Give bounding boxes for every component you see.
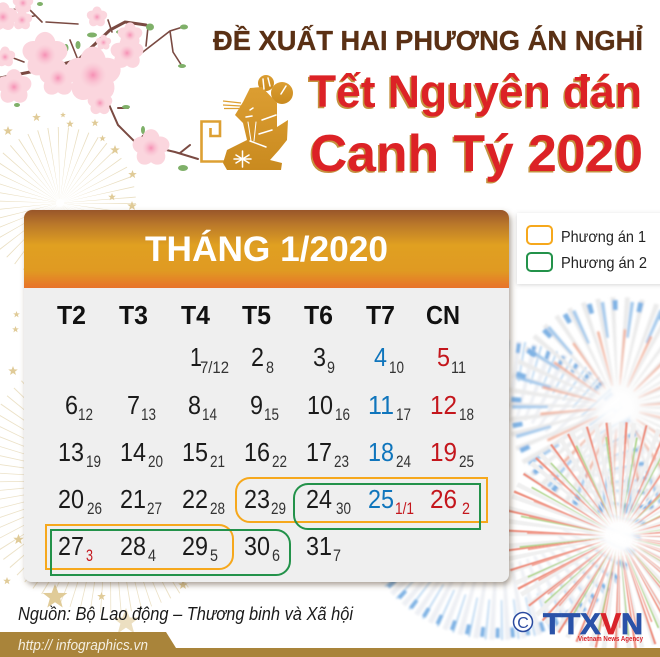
calendar dates: 14: [120, 437, 146, 467]
weekday headings: T6: [304, 300, 333, 330]
calendar dates: 22: [182, 484, 208, 514]
calendar dates: 29: [271, 499, 286, 518]
calendar dates: 12: [78, 405, 93, 424]
logo: TTXVN: TTXVN: [543, 608, 643, 641]
firework: blue and orange upper right: [516, 305, 660, 509]
weekday headings: T2: [57, 300, 86, 330]
calendar dates: 25: [368, 484, 394, 514]
calendar dates: 23: [334, 452, 349, 471]
calendar dates: 27: [147, 499, 162, 518]
highlight: option 1 part two: [46, 525, 233, 569]
calendar dates: 21: [120, 484, 146, 514]
calendar dates: 3: [313, 342, 326, 372]
icon: golden rat zodiac: [202, 75, 293, 170]
calendar dates: 18: [459, 405, 474, 424]
logo: TTXVN: Vietnam News Agency: [578, 634, 644, 643]
title line 3: Canh Tý 2020: [310, 125, 643, 183]
calendar dates: 5: [210, 546, 218, 565]
calendar dates: 24: [396, 452, 411, 471]
cherry blossom branch: [0, 0, 198, 171]
calendar dates: 10: [389, 358, 404, 377]
calendar dates: 2: [462, 499, 470, 518]
calendar dates: 7: [333, 546, 341, 565]
calendar dates: 21: [210, 452, 225, 471]
footer url: http:// infographics.vn: [18, 637, 148, 654]
highlight: option 2 part one: [294, 484, 480, 529]
calendar dates: 10: [307, 390, 333, 420]
legend: option 2: Phương án 2: [561, 255, 647, 272]
calendar dates: 23: [244, 484, 270, 514]
firework: gold top left: [3, 112, 137, 243]
calendar month title: THÁNG 1/2020: [145, 229, 388, 269]
calendar dates: 20: [148, 452, 163, 471]
calendar dates: 24: [306, 484, 332, 514]
legend: option 1: Phương án 1: [561, 229, 646, 246]
calendar dates: 26: [87, 499, 102, 518]
panel: calendar: [24, 210, 509, 582]
calendar dates: 12: [430, 390, 457, 420]
calendar dates: 27: [58, 531, 84, 561]
calendar body: [24, 210, 509, 582]
calendar dates: 16: [244, 437, 270, 467]
calendar dates: 1: [190, 342, 202, 372]
logo: TTXVN: C: [517, 615, 529, 632]
calendar dates: 4: [374, 342, 387, 372]
calendar dates: 16: [335, 405, 350, 424]
weekday headings: T7: [366, 300, 395, 330]
calendar dates: 15: [264, 405, 279, 424]
calendar dates: 1/1: [395, 499, 414, 518]
calendar dates: 11: [451, 358, 466, 377]
calendar dates: 15: [182, 437, 208, 467]
calendar dates: 8: [188, 390, 201, 420]
calendar dates: 4: [148, 546, 156, 565]
footer band: [0, 632, 660, 657]
calendar dates: 7: [127, 390, 140, 420]
calendar dates: 7/12: [200, 358, 229, 377]
calendar dates: 18: [368, 437, 394, 467]
calendar dates: 13: [58, 437, 84, 467]
calendar dates: 22: [272, 452, 287, 471]
calendar dates: 28: [120, 531, 146, 561]
calendar dates: 17: [306, 437, 332, 467]
calendar dates: 2: [251, 342, 264, 372]
calendar dates: 30: [336, 499, 351, 518]
calendar dates: 17: [396, 405, 411, 424]
title line 2: Tết Nguyên đán: [309, 66, 642, 117]
source note: Nguồn: Bộ Lao động – Thương binh và Xã hội: [18, 604, 354, 624]
calendar dates: 20: [58, 484, 84, 514]
title line 1: ĐỀ XUẤT HAI PHƯƠNG ÁN NGHỈ: [213, 24, 643, 56]
calendar dates: 5: [437, 342, 450, 372]
weekday headings: T5: [242, 300, 271, 330]
calendar dates: 11: [368, 390, 394, 420]
firework: red and green lower right: [555, 472, 660, 600]
weekday headings: [57, 300, 460, 330]
calendar header band: [24, 210, 509, 288]
calendar dates: 25: [459, 452, 474, 471]
calendar dates: 3: [86, 546, 93, 565]
calendar dates: 19: [430, 437, 457, 467]
legend: [517, 213, 660, 284]
calendar dates: 9: [250, 390, 263, 420]
legend: option 1: [527, 226, 646, 246]
firework: gold lower left: [3, 311, 210, 633]
weekday headings: T4: [181, 300, 211, 330]
legend: option 2: [527, 253, 647, 272]
calendar dates: 8: [266, 358, 274, 377]
calendar dates: 28: [210, 499, 225, 518]
calendar dates: 6: [65, 390, 78, 420]
highlight: option 2 part two: [51, 530, 290, 575]
calendar dates: 26: [430, 484, 457, 514]
calendar dates: 9: [327, 358, 335, 377]
calendar dates: 30: [244, 531, 270, 561]
highlight: option 1 part one: [236, 478, 487, 522]
calendar dates: 31: [306, 531, 332, 561]
calendar dates: 29: [182, 531, 208, 561]
calendar dates: 14: [202, 405, 217, 424]
weekday headings: T3: [119, 300, 148, 330]
calendar dates: 19: [86, 452, 101, 471]
title: [213, 24, 643, 183]
calendar dates: 6: [272, 546, 280, 565]
calendar dates: 13: [141, 405, 156, 424]
calendar dates: [58, 342, 474, 565]
weekday headings: CN: [426, 300, 460, 330]
firework: blue lower: [357, 347, 643, 633]
